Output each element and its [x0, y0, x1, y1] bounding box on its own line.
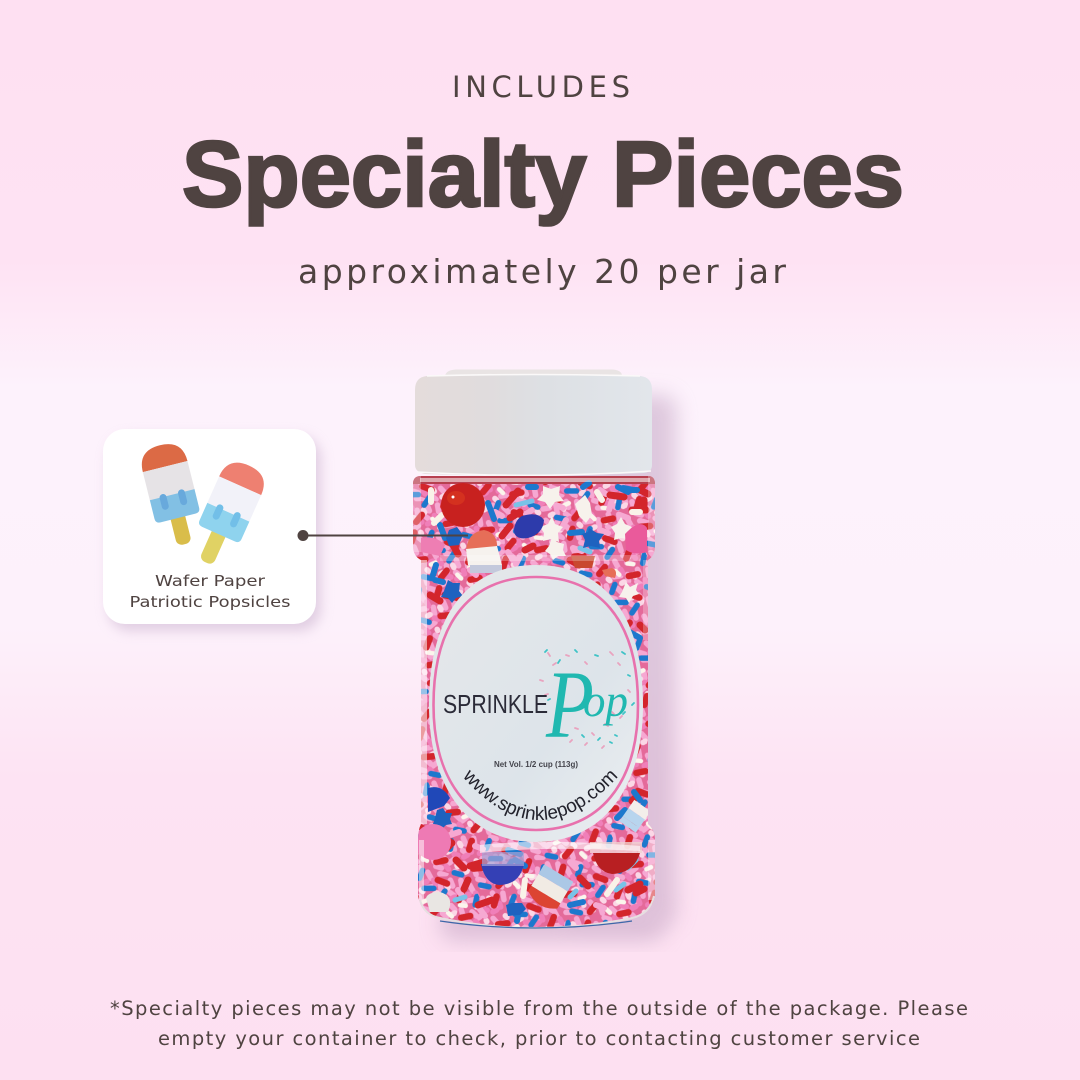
footnote: *Specialty pieces may not be visible from the outside of the package. Please — [110, 997, 968, 1020]
website url: www.sprinklepop.com — [464, 770, 618, 821]
callout card: wafer paper patriotic popsicles — [103, 429, 321, 631]
icon: popsicle right — [185, 456, 270, 572]
footnote: empty your container to check, prior to contacting customer service — [158, 1027, 920, 1050]
jar base rim — [420, 896, 654, 928]
white cap — [415, 370, 652, 476]
popsicle in jar: bottom — [528, 864, 574, 909]
footnote — [110, 997, 968, 1050]
pink ball lower left — [415, 824, 451, 860]
product jar — [413, 370, 684, 948]
pink candy left — [421, 537, 445, 556]
popsicle in jar: right side — [619, 800, 651, 833]
blue candy — [514, 514, 544, 538]
red half ball behind jar shoulder — [571, 556, 595, 568]
white star sprinkles — [537, 486, 639, 603]
pink candy right — [625, 524, 647, 554]
net volume: Net Vol. 1/2 cup (113g) — [494, 759, 578, 769]
jar shadow — [440, 395, 676, 941]
red ball — [441, 483, 485, 527]
card caption: Patriotic Popsicles — [130, 593, 290, 611]
white disc bottom left — [426, 892, 450, 912]
heading: includes: INCLUDES — [452, 70, 630, 104]
title: specialty pieces: Specialty Pieces — [182, 122, 904, 226]
blue ball left — [428, 787, 450, 812]
jar label — [429, 565, 643, 842]
subtitle: approximately 20 per jar: approximately 20 per jar — [298, 252, 786, 291]
logo confetti — [540, 650, 634, 748]
label pink border — [434, 577, 638, 830]
logo: pop script: op — [583, 675, 628, 726]
popsicle in jar: top — [465, 530, 616, 578]
dark blue star sprinkles — [433, 527, 604, 916]
card shadow — [108, 436, 321, 631]
jar body with sprinkles — [410, 474, 660, 939]
logo: pop script: P — [545, 651, 594, 758]
logo: sprinkle: SPRINKLE — [443, 689, 548, 719]
card — [103, 429, 316, 624]
card caption: Wafer Paper — [155, 572, 266, 590]
callout connector — [298, 530, 468, 541]
blue ball bottom — [481, 864, 524, 885]
glass highlights — [413, 476, 656, 900]
red half ball bottom — [593, 853, 640, 874]
icon: popsicle left — [138, 440, 207, 550]
card caption — [130, 572, 290, 611]
